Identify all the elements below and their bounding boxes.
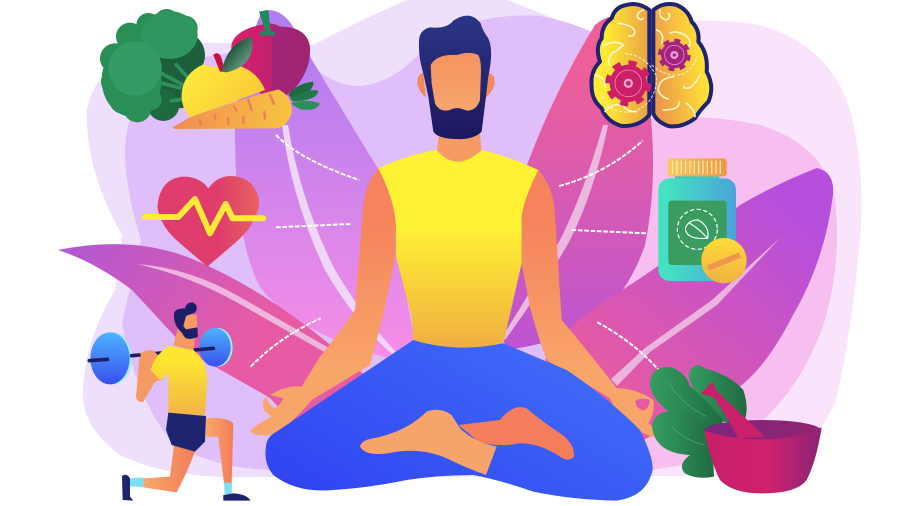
dashed ring xyxy=(602,53,697,112)
neck xyxy=(675,175,719,182)
pill xyxy=(701,238,747,283)
cap xyxy=(668,158,727,176)
icon: supplement bottle xyxy=(658,158,747,283)
rear sock and shoe xyxy=(122,475,143,501)
dashed ring xyxy=(677,209,717,249)
dashed connector lines xyxy=(251,135,664,376)
background blob: pale lavender xyxy=(83,0,640,477)
barbell xyxy=(89,348,213,361)
leaf mark xyxy=(685,220,708,239)
front leg xyxy=(206,418,233,483)
background blob: pale pink right xyxy=(560,21,862,476)
shirt xyxy=(151,346,207,415)
shirt xyxy=(378,150,538,348)
herb leaves xyxy=(650,365,747,478)
beard xyxy=(180,322,198,339)
front sock and shoe xyxy=(223,483,251,501)
rear leg xyxy=(143,445,195,492)
bell pepper xyxy=(231,10,310,100)
near plate xyxy=(90,332,132,384)
arm xyxy=(136,350,163,402)
mortar bowl xyxy=(704,427,822,493)
right arm xyxy=(522,170,657,437)
far plate xyxy=(199,328,233,367)
broccoli xyxy=(100,9,207,122)
carrot xyxy=(173,82,320,129)
meditating man xyxy=(251,16,657,501)
mortar rim xyxy=(704,420,821,441)
herbs and mortar xyxy=(650,365,822,493)
hand gap xyxy=(635,399,650,411)
icon: brain with gears xyxy=(591,4,711,126)
foot: right xyxy=(458,407,574,460)
pestle xyxy=(701,382,765,438)
icon: heart with pulse xyxy=(145,176,263,267)
hair xyxy=(174,303,197,333)
weightlifter xyxy=(89,303,251,501)
hand xyxy=(140,350,153,360)
gears xyxy=(608,41,688,103)
background blob: medium lavender xyxy=(122,16,620,470)
legs xyxy=(265,340,653,501)
foot: left xyxy=(360,410,497,475)
neck xyxy=(173,327,195,352)
neck xyxy=(437,133,482,166)
hair and beard xyxy=(419,16,491,139)
background blob: medium pink right xyxy=(560,117,837,472)
leaf: upper right xyxy=(500,16,653,350)
ears xyxy=(417,73,495,97)
leaf: lower right xyxy=(545,168,833,442)
label xyxy=(668,201,727,265)
body xyxy=(658,178,736,281)
brain folds xyxy=(595,10,700,117)
leaf: upper left xyxy=(235,10,420,370)
face xyxy=(431,53,481,111)
cap ridges xyxy=(673,161,720,174)
food group xyxy=(100,9,320,129)
shorts xyxy=(166,413,206,452)
arms xyxy=(251,168,396,435)
leaf: lower left xyxy=(58,244,370,430)
head xyxy=(181,313,197,333)
apple xyxy=(182,37,265,117)
